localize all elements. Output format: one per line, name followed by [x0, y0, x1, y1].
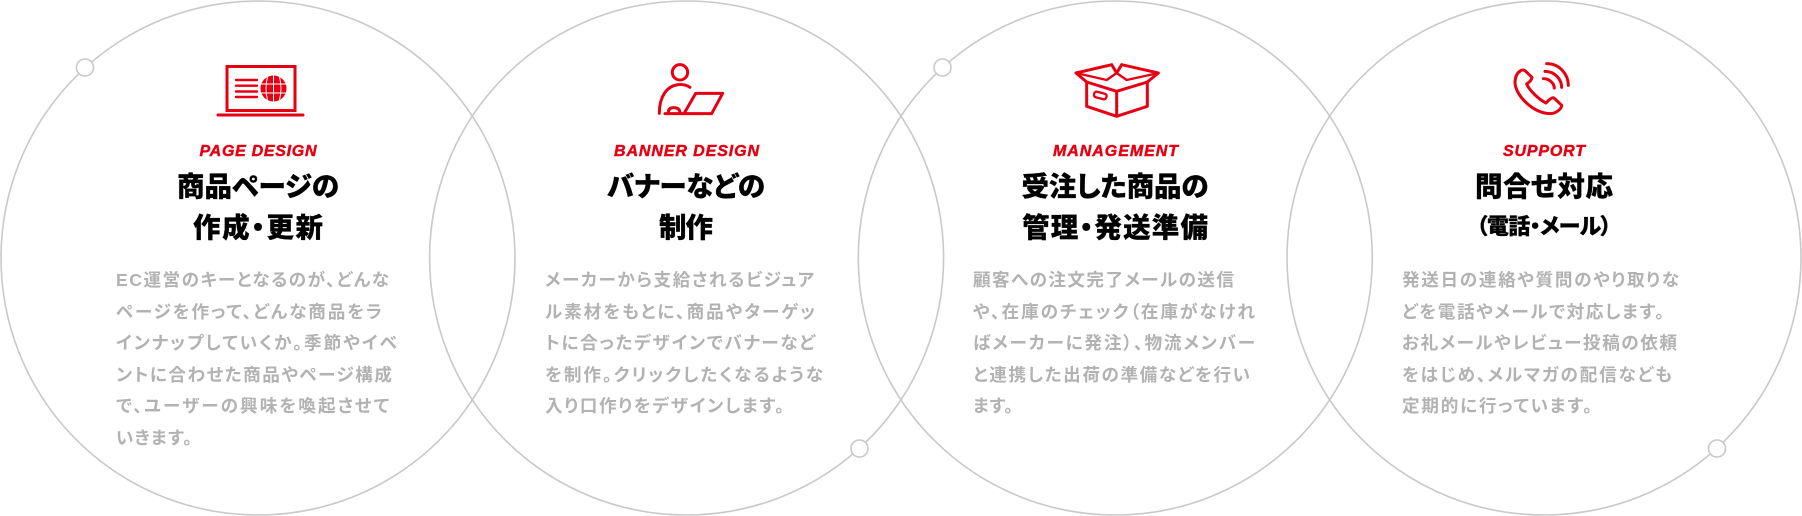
- body text: ル素材をもとに、商品やターゲッ: [545, 302, 815, 322]
- body text: で、ユーザーの興味を喚起させて: [116, 396, 389, 416]
- body text: [1402, 270, 1679, 416]
- body text: ます。: [973, 396, 1013, 416]
- heading: （電話・メール）: [1476, 214, 1612, 239]
- label: PAGE DESIGN: PAGE DESIGN: [200, 143, 317, 160]
- label: SUPPORT: SUPPORT: [1503, 143, 1586, 160]
- heading: 管理・発送準備: [1022, 212, 1208, 243]
- body text: いきます。: [116, 428, 192, 448]
- body text: ページを作って、どんな商品をラ: [116, 302, 382, 322]
- heading: 作成・更新: [193, 212, 323, 243]
- body text: 定期的に行っています。: [1402, 396, 1592, 416]
- panel: banner design: [545, 65, 823, 416]
- body text: EC運営のキーとなるのが、どんな: [116, 270, 389, 290]
- label: BANNER DESIGN: BANNER DESIGN: [614, 143, 759, 160]
- body text: [973, 270, 1256, 416]
- heading: [1475, 171, 1614, 239]
- body text: ントに合わせた商品やページ構成: [116, 365, 392, 385]
- panel: page design: [116, 66, 397, 448]
- heading: 受注した商品の: [1022, 171, 1208, 202]
- body text: をはじめ、メルマガの配信なども: [1402, 365, 1672, 385]
- heading: [1022, 171, 1208, 243]
- panel: support: [1402, 64, 1679, 416]
- heading: 制作: [659, 212, 713, 243]
- panel: management: [973, 65, 1256, 416]
- body text: を制作。クリックしたくなるような: [545, 365, 823, 385]
- body text: ばメーカーに発注）、物流メンバー: [973, 333, 1255, 353]
- body text: 発送日の連絡や質問のやり取りな: [1402, 270, 1679, 290]
- icon: phone: [1515, 64, 1568, 114]
- body text: 入り口作りをデザインします。: [545, 396, 784, 416]
- icon: open box: [1076, 65, 1158, 116]
- body text: [545, 270, 823, 416]
- heading: [607, 171, 765, 243]
- body text: インナップしていくか。季節やイベ: [116, 333, 397, 353]
- body text: [116, 270, 397, 448]
- body text: どを電話やメールで対応します。: [1402, 302, 1664, 322]
- body text: や、在庫のチェック（在庫がなけれ: [973, 302, 1256, 322]
- heading: 商品ページの: [177, 171, 339, 202]
- heading: 問合せ対応: [1475, 171, 1614, 202]
- heading: [177, 171, 339, 243]
- body text: 顧客への注文完了メールの送信: [973, 270, 1234, 290]
- body text: メーカーから支給されるビジュア: [545, 270, 814, 290]
- body text: と連携した出荷の準備などを行い: [973, 365, 1250, 385]
- heading: バナーなどの: [607, 171, 765, 202]
- body text: トに合ったデザインでバナーなど: [545, 333, 817, 353]
- body text: お礼メールやレビュー投稿の依頼: [1402, 333, 1677, 353]
- icon: laptop with globe: [218, 66, 303, 115]
- label: MANAGEMENT: MANAGEMENT: [1053, 143, 1179, 160]
- icon: person at laptop: [659, 65, 723, 114]
